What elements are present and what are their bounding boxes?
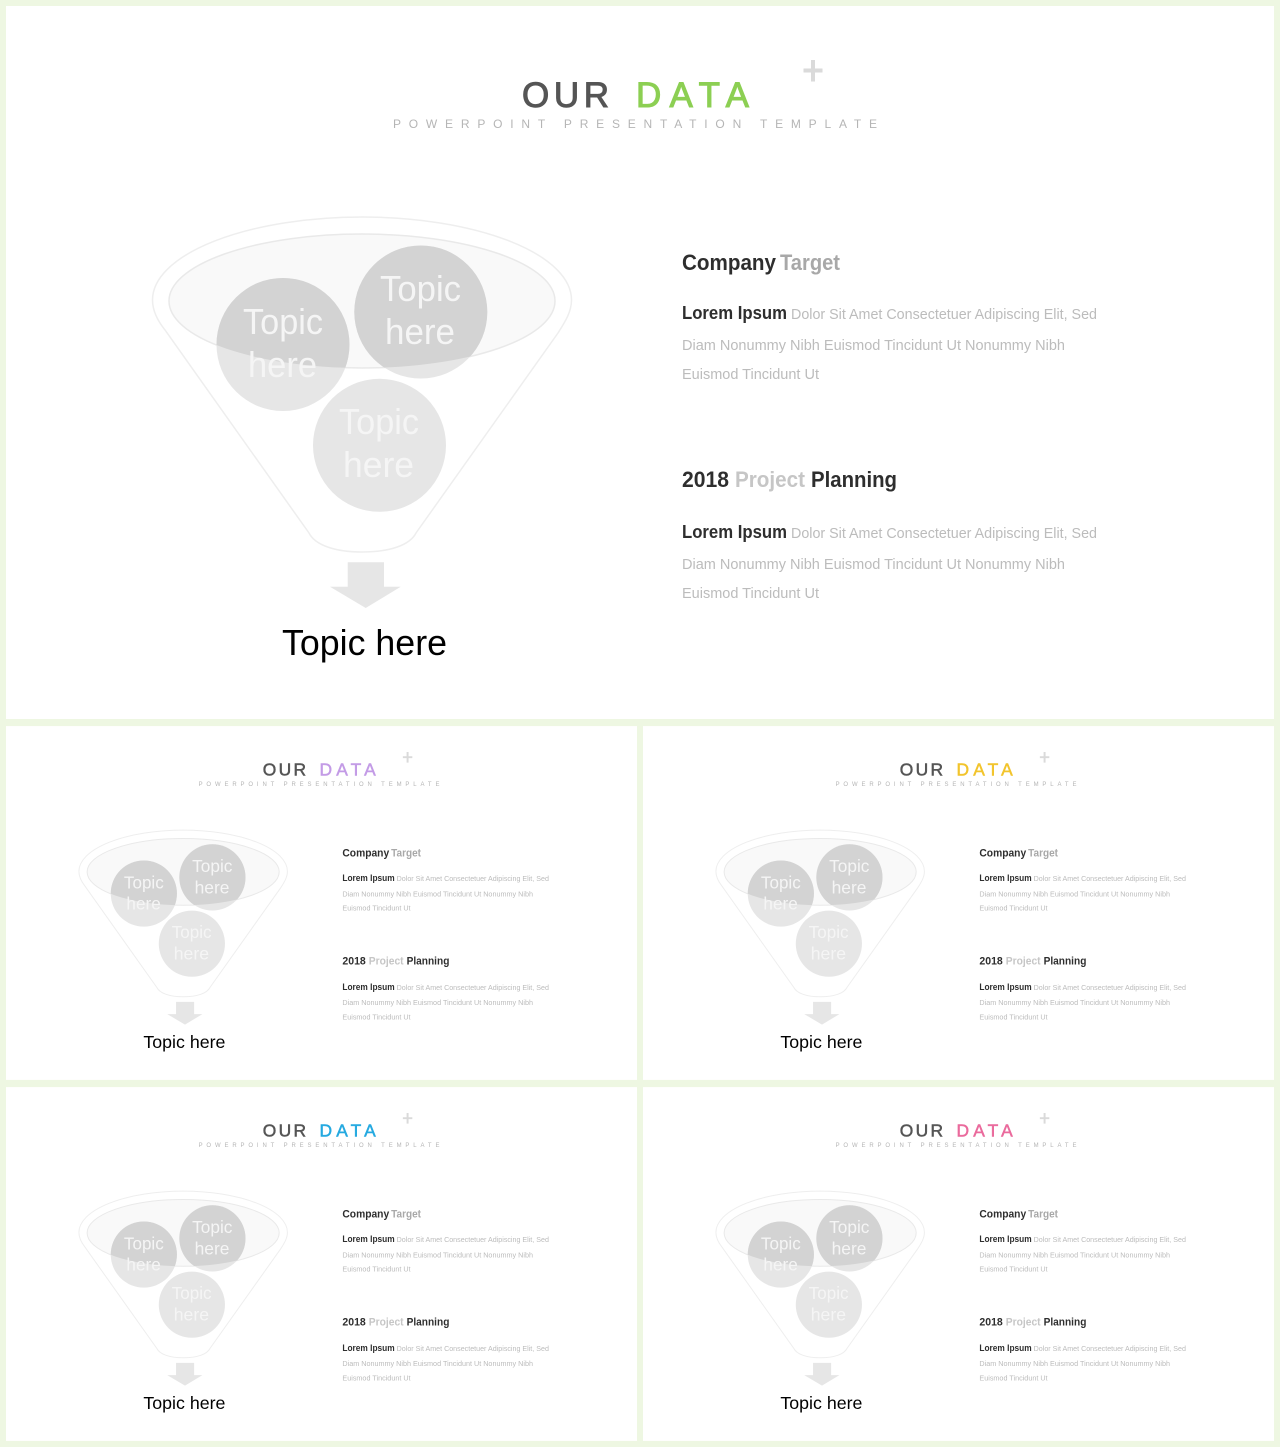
circle: topic bottom: here <box>811 1304 846 1324</box>
circle: topic left: here <box>126 1255 161 1275</box>
title <box>900 759 1013 779</box>
funnel diagram <box>716 830 924 997</box>
text block: project planning: Planning <box>407 1316 449 1328</box>
arrow <box>167 1363 202 1386</box>
icon: plus <box>403 1113 412 1124</box>
text block: project planning: Diam Nonummy Nibh Euismod Tincidunt Ut Nonummy Nibh <box>342 1359 533 1368</box>
funnel outline <box>79 1191 287 1358</box>
circle: topic bottom: Topic <box>339 401 419 442</box>
text block: project planning: Planning <box>1044 1316 1086 1328</box>
title: DATA <box>957 759 1013 779</box>
text block: project planning: Euismod Tincidunt Ut <box>342 1013 411 1022</box>
subtitle: POWERPOINT PRESENTATION TEMPLATE <box>836 782 1076 788</box>
text block: company target: Dolor Sit Amet Consectetuer Adipiscing Elit, Sed <box>791 307 1097 323</box>
funnel opening ellipse <box>87 1200 279 1266</box>
text block: project planning: Project <box>1006 955 1041 967</box>
funnel opening ellipse <box>724 839 916 905</box>
circle: topic left: Topic <box>124 872 164 892</box>
text block: company target: Company <box>342 1208 390 1220</box>
text block: company target: Target <box>1028 1208 1058 1220</box>
title <box>900 1120 1013 1140</box>
funnel outline <box>79 830 287 997</box>
circle: topic bottom: here <box>174 1304 209 1324</box>
title: DATA <box>636 76 750 115</box>
text block: project planning: Dolor Sit Amet Consectetuer Adipiscing Elit, Sed <box>397 983 549 992</box>
circle: topic bottom <box>159 911 225 977</box>
circle: topic left <box>111 1221 177 1288</box>
title <box>522 76 750 115</box>
circle: topic right <box>354 246 487 378</box>
funnel opening ellipse <box>724 1200 916 1266</box>
circle: topic bottom: Topic <box>172 922 212 942</box>
title: OUR <box>522 76 609 115</box>
circle: topic right <box>816 1205 883 1271</box>
circle: topic left <box>216 278 350 411</box>
text block: company target: Company <box>979 1208 1027 1220</box>
subtitle: POWERPOINT PRESENTATION TEMPLATE <box>199 782 439 788</box>
funnel result label: Topic here <box>143 1032 225 1052</box>
text block: company target: Dolor Sit Amet Consectetuer Adipiscing Elit, Sed <box>397 874 549 883</box>
text block: company target <box>342 1208 549 1274</box>
funnel result label: Topic here <box>780 1393 862 1413</box>
funnel diagram <box>79 1191 287 1358</box>
text block: company target: Target <box>780 250 841 275</box>
funnel opening ellipse <box>169 234 555 368</box>
text block: project planning: Project <box>1006 1316 1041 1328</box>
text block: company target: Dolor Sit Amet Consectetuer Adipiscing Elit, Sed <box>397 1235 549 1244</box>
funnel result label: Topic here <box>143 1393 225 1413</box>
title: DATA <box>957 1120 1013 1140</box>
text block: project planning: Euismod Tincidunt Ut <box>979 1013 1048 1022</box>
icon: plus <box>1040 752 1049 763</box>
text block: company target: Euismod Tincidunt Ut <box>682 367 819 383</box>
text block: company target: Diam Nonummy Nibh Euismod Tincidunt Ut Nonummy Nibh <box>979 1250 1170 1259</box>
funnel outline <box>716 1191 924 1358</box>
text block: project planning: 2018 <box>682 467 729 492</box>
text block: company target <box>979 1208 1186 1274</box>
text block: company target: Dolor Sit Amet Consectetuer Adipiscing Elit, Sed <box>1034 1235 1186 1244</box>
text block: company target: Euismod Tincidunt Ut <box>342 1265 411 1274</box>
circle: topic left: Topic <box>761 872 801 892</box>
circle: topic right: Topic <box>829 1217 869 1237</box>
text block: company target: Company <box>342 847 390 859</box>
icon: plus <box>1040 1113 1049 1124</box>
circle: topic left <box>748 1221 814 1288</box>
text block: project planning: Diam Nonummy Nibh Euismod Tincidunt Ut Nonummy Nibh <box>979 998 1170 1007</box>
text block: project planning <box>342 1316 549 1383</box>
circle: topic right: Topic <box>192 1217 232 1237</box>
text block: company target: Diam Nonummy Nibh Euismod Tincidunt Ut Nonummy Nibh <box>682 338 1065 354</box>
subtitle: POWERPOINT PRESENTATION TEMPLATE <box>836 1143 1076 1149</box>
text block: project planning: Project <box>369 955 404 967</box>
text block: company target: Lorem Ipsum <box>342 873 395 883</box>
funnel result label: Topic here <box>780 1032 862 1052</box>
circle: topic bottom: Topic <box>172 1283 212 1303</box>
arrow <box>804 1363 839 1386</box>
arrow <box>804 1002 839 1025</box>
text block: company target <box>979 847 1186 913</box>
text block: project planning: Lorem Ipsum <box>682 522 787 542</box>
arrow <box>330 562 401 608</box>
circle: topic right: Topic <box>192 856 232 876</box>
text block: company target: Diam Nonummy Nibh Euismod Tincidunt Ut Nonummy Nibh <box>342 1250 533 1259</box>
circle: topic left: here <box>763 1255 798 1275</box>
text block: project planning: Project <box>735 467 806 492</box>
text block: company target: Target <box>391 1208 421 1220</box>
text block: project planning <box>979 955 1186 1022</box>
circle: topic bottom <box>159 1272 225 1338</box>
circle: topic left <box>748 860 814 927</box>
text block: project planning <box>979 1316 1186 1383</box>
circle: topic left: Topic <box>124 1233 164 1253</box>
circle: topic left: here <box>763 894 798 914</box>
text block: project planning: Lorem Ipsum <box>979 1343 1032 1353</box>
text block: company target: Euismod Tincidunt Ut <box>342 904 411 913</box>
circle: topic right: Topic <box>829 856 869 876</box>
text block: project planning: 2018 <box>979 955 1003 967</box>
title: OUR <box>263 1120 306 1140</box>
text block: project planning: Lorem Ipsum <box>342 1343 395 1353</box>
title: DATA <box>320 1120 376 1140</box>
title: OUR <box>900 759 943 779</box>
panel: small slide (purple) <box>6 726 637 1080</box>
text block: project planning: 2018 <box>342 955 366 967</box>
circle: topic bottom <box>796 911 862 977</box>
text block: project planning: Dolor Sit Amet Consectetuer Adipiscing Elit, Sed <box>791 526 1097 542</box>
text block: project planning: Diam Nonummy Nibh Euismod Tincidunt Ut Nonummy Nibh <box>342 998 533 1007</box>
icon: plus <box>403 752 412 763</box>
title <box>263 1120 376 1140</box>
circle: topic right: Topic <box>380 268 461 309</box>
subtitle: POWERPOINT PRESENTATION TEMPLATE <box>199 1143 439 1149</box>
text block: company target: Euismod Tincidunt Ut <box>979 904 1048 913</box>
text block: project planning: Dolor Sit Amet Consectetuer Adipiscing Elit, Sed <box>397 1344 549 1353</box>
text block: project planning: Planning <box>811 467 897 492</box>
circle: topic left: here <box>248 344 317 385</box>
text block: project planning: 2018 <box>979 1316 1003 1328</box>
funnel result label: Topic here <box>282 622 447 663</box>
circle: topic right: here <box>832 877 866 897</box>
text block: project planning: Lorem Ipsum <box>342 982 395 992</box>
title: OUR <box>900 1120 943 1140</box>
title <box>263 759 376 779</box>
title: DATA <box>320 759 376 779</box>
text block: company target: Company <box>682 250 777 275</box>
circle: topic right: here <box>195 1238 229 1258</box>
text block: company target: Dolor Sit Amet Consectetuer Adipiscing Elit, Sed <box>1034 874 1186 883</box>
text block: project planning: Planning <box>407 955 449 967</box>
text block: project planning: Dolor Sit Amet Consectetuer Adipiscing Elit, Sed <box>1034 1344 1186 1353</box>
text block: project planning: Euismod Tincidunt Ut <box>682 586 819 602</box>
text block: project planning: Euismod Tincidunt Ut <box>979 1374 1048 1383</box>
circle: topic right: here <box>385 311 455 352</box>
panel: small slide (pink) <box>643 1087 1274 1441</box>
icon: plus <box>804 60 822 82</box>
circle: topic right <box>179 844 246 910</box>
circle: topic bottom: here <box>343 444 414 485</box>
panel: small slide (blue) <box>6 1087 637 1441</box>
title: OUR <box>263 759 306 779</box>
text block: company target: Target <box>391 847 421 859</box>
funnel diagram <box>79 830 287 997</box>
circle: topic bottom <box>313 379 446 512</box>
circle: topic left: Topic <box>243 301 323 342</box>
text block: project planning: Euismod Tincidunt Ut <box>342 1374 411 1383</box>
circle: topic bottom: here <box>811 943 846 963</box>
text block: project planning: Project <box>369 1316 404 1328</box>
text block: project planning: Dolor Sit Amet Consectetuer Adipiscing Elit, Sed <box>1034 983 1186 992</box>
text block: company target <box>682 250 1097 383</box>
circle: topic bottom: Topic <box>809 922 849 942</box>
arrow <box>167 1002 202 1025</box>
text block: project planning: Lorem Ipsum <box>979 982 1032 992</box>
text block: company target: Lorem Ipsum <box>342 1234 395 1244</box>
text block: project planning <box>682 467 1097 602</box>
text block: project planning: 2018 <box>342 1316 366 1328</box>
funnel diagram <box>152 217 572 552</box>
circle: topic left <box>111 860 177 927</box>
funnel outline <box>152 217 572 552</box>
text block: company target: Euismod Tincidunt Ut <box>979 1265 1048 1274</box>
panel: small slide (yellow) <box>643 726 1274 1080</box>
text block: company target: Diam Nonummy Nibh Euismod Tincidunt Ut Nonummy Nibh <box>979 889 1170 898</box>
text block: project planning <box>342 955 549 1022</box>
circle: topic right <box>179 1205 246 1271</box>
text block: company target: Lorem Ipsum <box>979 1234 1032 1244</box>
circle: topic bottom <box>796 1272 862 1338</box>
circle: topic right <box>816 844 883 910</box>
text block: project planning: Diam Nonummy Nibh Euismod Tincidunt Ut Nonummy Nibh <box>682 557 1065 573</box>
funnel outline <box>716 830 924 997</box>
circle: topic left: here <box>126 894 161 914</box>
circle: topic bottom: here <box>174 943 209 963</box>
funnel opening ellipse <box>87 839 279 905</box>
circle: topic left: Topic <box>761 1233 801 1253</box>
circle: topic right: here <box>832 1238 866 1258</box>
circle: topic right: here <box>195 877 229 897</box>
text block: company target: Lorem Ipsum <box>979 873 1032 883</box>
text block: project planning: Diam Nonummy Nibh Euismod Tincidunt Ut Nonummy Nibh <box>979 1359 1170 1368</box>
panel: main slide (green) <box>6 6 1274 719</box>
subtitle: POWERPOINT PRESENTATION TEMPLATE <box>393 117 877 131</box>
text block: project planning: Planning <box>1044 955 1086 967</box>
text block: company target: Target <box>1028 847 1058 859</box>
text block: company target: Lorem Ipsum <box>682 303 787 323</box>
text block: company target: Company <box>979 847 1027 859</box>
text block: company target <box>342 847 549 913</box>
text block: company target: Diam Nonummy Nibh Euismod Tincidunt Ut Nonummy Nibh <box>342 889 533 898</box>
circle: topic bottom: Topic <box>809 1283 849 1303</box>
funnel diagram <box>716 1191 924 1358</box>
